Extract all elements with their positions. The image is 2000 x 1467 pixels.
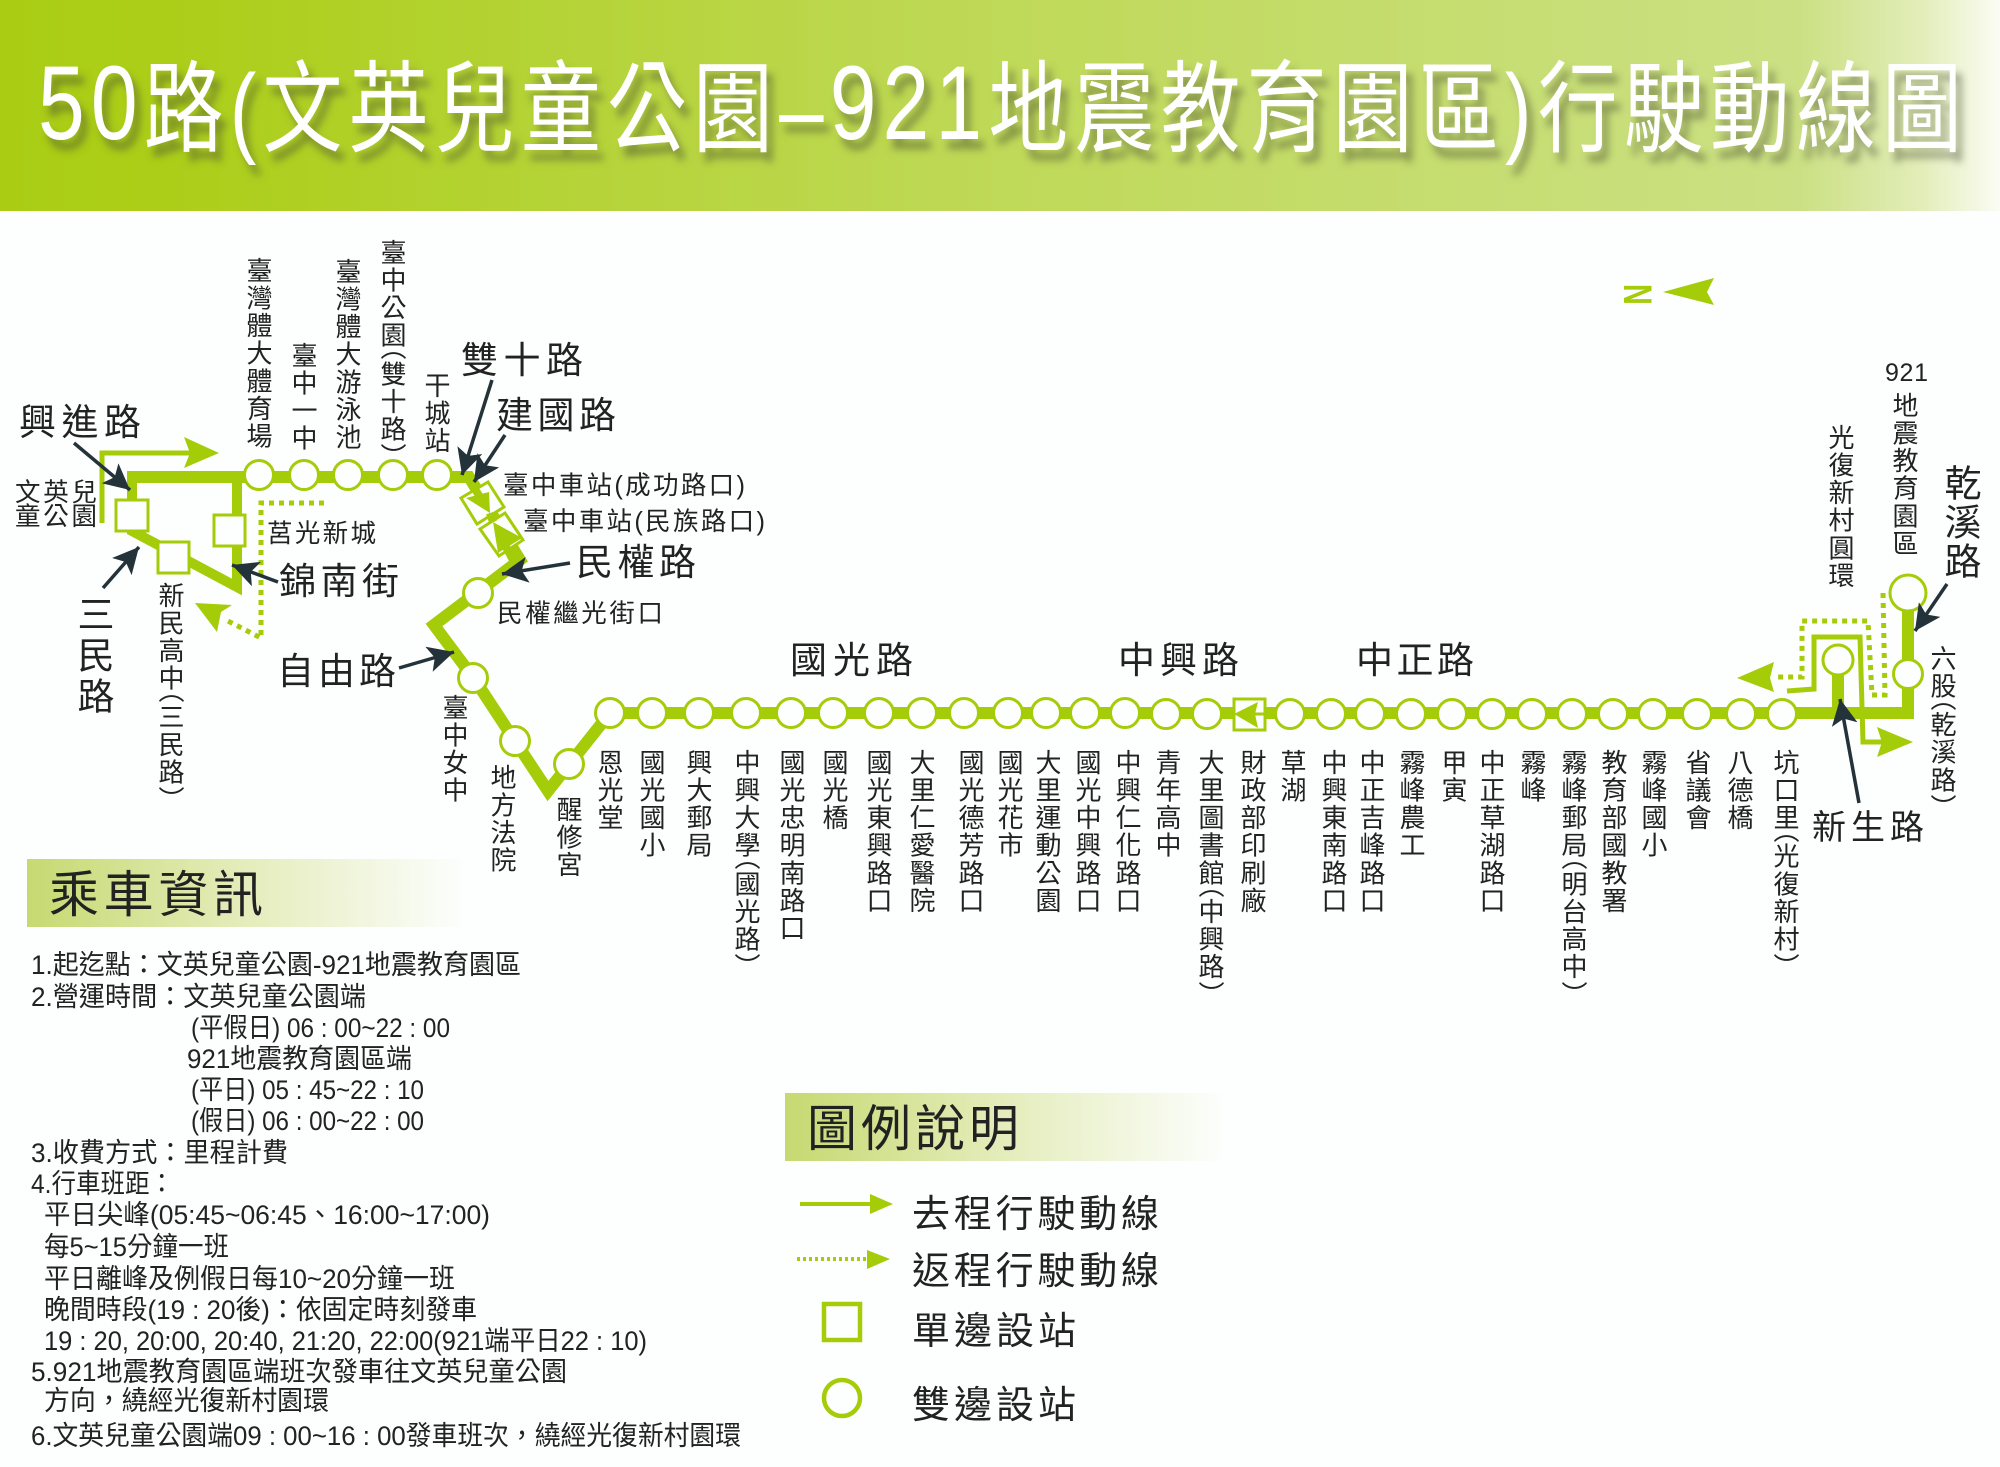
thin outbound arrow: start — [102, 437, 219, 523]
title text: 路(文英兒童公園– — [144, 55, 824, 166]
small station labels: horizontal: 莒光新城 — [267, 520, 376, 548]
label: 國光國小: 國光國小 — [634, 749, 671, 859]
two-side stations: top row and descent — [244, 460, 584, 778]
label: 大里運動公園: 大里運動公園 — [1030, 749, 1067, 915]
boarding info text: 5.921地震教育園區端班次發車往文英兒童公園 — [31, 1357, 567, 1387]
label: 臺中一中: 臺中一中 — [286, 342, 323, 452]
label: 草湖: 草湖 — [1275, 749, 1312, 804]
road names: 錦南街 — [279, 561, 399, 602]
label: 興大郵局: 興大郵局 — [681, 749, 718, 859]
vertical road name: 三民路: 三民路 — [69, 595, 123, 718]
legend: one-side station — [824, 1304, 1076, 1353]
label: 國光東興路口: 國光東興路口 — [861, 749, 898, 915]
boarding info text: (平日) 05 : 45~22 : 10 — [191, 1075, 424, 1105]
dotted return loop arrow: 光復新村 — [1737, 593, 1885, 695]
title banner — [0, 0, 2000, 211]
boarding info text: (平假日) 06 : 00~22 : 00 — [191, 1013, 450, 1043]
main outbound route line — [127, 475, 1908, 791]
small station labels: horizontal: 文英兒 — [15, 479, 97, 507]
label: 中興大學(國光路): 中興大學（ 國光路 ） — [729, 749, 766, 979]
legend band — [785, 1093, 1227, 1161]
boarding info text: 1.起迄點：文英兒童公園-921地震教育園區 — [31, 950, 521, 980]
legend band: 圖例說明 — [807, 1101, 1019, 1157]
two-side stations: terminal end — [1823, 575, 1926, 688]
label: 恩光堂: 恩光堂 — [592, 749, 629, 832]
label: 中興東南路口: 中興東南路口 — [1316, 749, 1353, 915]
label: 霧峰: 霧峰 — [1515, 749, 1552, 804]
north compass — [1615, 278, 1714, 305]
small station labels: horizontal: 童公園 — [15, 503, 97, 531]
boarding info band — [27, 859, 467, 927]
legend: return line: 返程行駛動線 — [912, 1251, 1159, 1293]
label: 光復新村圓環: 光復新村圓環 — [1823, 424, 1860, 590]
title text — [38, 45, 1962, 166]
north compass: N — [1615, 284, 1660, 305]
label: 干城站: 干城站 — [419, 372, 456, 455]
label: 醒修宮: 醒修宮 — [551, 796, 588, 879]
label: 國光德芳路口: 國光德芳路口 — [953, 749, 990, 915]
boarding info text: 方向，繞經光復新村園環 — [44, 1386, 329, 1416]
label: 六股(乾溪路): 六股（ 乾溪路 ） — [1925, 645, 1962, 820]
label: 臺灣體大體育場: 臺灣體大體育場 — [241, 257, 278, 450]
legend: two-side station — [824, 1380, 1076, 1427]
label: 大里圖書館(中興路): 大里圖書館（ 中興路 ） — [1193, 749, 1230, 1007]
road names: 自由路 — [277, 651, 396, 692]
one-side stations: start loop — [116, 500, 245, 573]
one-side stations: Taichung Station — [461, 480, 523, 562]
boarding info text: 6.文英兒童公園端09 : 00~16 : 00發車班次，繞經光復新村園環 — [31, 1421, 741, 1451]
label: 國光中興路口: 國光中興路口 — [1070, 749, 1107, 915]
boarding info text: 19 : 20, 20:00, 20:40, 21:20, 22:00(921端平日22 : 10) — [44, 1326, 647, 1356]
small station labels: horizontal: 臺中車站(成功路口) — [503, 472, 745, 500]
road names — [19, 340, 1924, 847]
road names: 新生路 — [1812, 809, 1924, 847]
boarding info text: 3.收費方式：里程計費 — [31, 1138, 288, 1168]
boarding info text: (假日) 06 : 00~22 : 00 — [191, 1106, 424, 1136]
small station labels: horizontal: 921 — [1885, 359, 1928, 387]
label: 坑口里(光復新村): 坑口里（ 光復新村 ） — [1768, 749, 1805, 979]
boarding info text: 每5~15分鐘一班 — [44, 1232, 229, 1262]
small station labels: horizontal: 臺中車站(民族路口) — [523, 508, 765, 536]
boarding info text: 2.營運時間：文英兒童公園端 — [31, 982, 366, 1012]
boarding info text: 4.行車班距： — [31, 1169, 174, 1199]
boarding info band: 乘車資訊 — [49, 867, 263, 923]
label: 中興仁化路口: 中興仁化路口 — [1110, 749, 1147, 915]
two-side stations: main line — [596, 698, 1796, 728]
vertical road name: 乾溪路: 乾溪路 — [1936, 464, 1990, 581]
legend: outbound line: 去程行駛動線 — [912, 1194, 1159, 1236]
road names: 中正路 — [1356, 640, 1474, 681]
label: 八德橋: 八德橋 — [1722, 749, 1759, 832]
label: 甲寅: 甲寅 — [1436, 749, 1473, 804]
small station labels: horizontal — [15, 359, 1928, 628]
road names: 建國路 — [496, 395, 616, 436]
label: 省議會: 省議會 — [1680, 749, 1717, 832]
label: 國光忠明南路口: 國光忠明南路口 — [774, 749, 811, 942]
label: 國光花市: 國光花市 — [992, 749, 1029, 859]
label: 國光橋: 國光橋 — [817, 749, 854, 832]
label: 霧峰郵局(明台高中): 霧峰郵局（ 明台高中 ） — [1556, 749, 1593, 1007]
label: 臺中女中: 臺中女中 — [437, 694, 474, 804]
road names: 雙十路 — [461, 340, 583, 381]
one-side station with direction arrow — [1234, 699, 1265, 730]
label: 霧峰農工: 霧峰農工 — [1394, 749, 1431, 859]
road names: 民權路 — [576, 542, 696, 583]
road names: 興進路 — [19, 402, 141, 443]
road names: 中興路 — [1118, 640, 1239, 681]
boarding info text: 晚間時段(19 : 20後)：依固定時刻發車 — [44, 1295, 477, 1325]
label: 教育部國教署: 教育部國教署 — [1596, 749, 1633, 915]
label: 地震教育園區: 地震教育園區 — [1887, 392, 1924, 558]
label: 新民高中(三民路): 新民高中（ 三民路 ） — [153, 582, 190, 812]
boarding info text: 平日離峰及例假日每10~20分鐘一班 — [44, 1264, 455, 1294]
label: 財政部印刷廠: 財政部印刷廠 — [1235, 749, 1272, 915]
legend: outbound line — [800, 1194, 1159, 1236]
label: 地方法院: 地方法院 — [485, 764, 522, 874]
label: 臺灣體大游泳池: 臺灣體大游泳池 — [330, 258, 367, 451]
small station labels: horizontal: 民權繼光街口 — [497, 600, 663, 628]
boarding info text: 平日尖峰(05:45~06:45、16:00~17:00) — [44, 1200, 490, 1230]
legend: one-side station: 單邊設站 — [912, 1311, 1076, 1353]
title text: 50 — [38, 45, 138, 162]
road names: 國光路 — [790, 640, 913, 681]
label: 霧峰國小: 霧峰國小 — [1636, 749, 1673, 859]
boarding info text — [31, 950, 741, 1451]
pointer arrows to road names — [74, 380, 1947, 803]
thin outbound loop arrow: 光復新村 — [1787, 637, 1913, 757]
label: 中正草湖路口: 中正草湖路口 — [1474, 749, 1511, 915]
dotted return arrow: start — [195, 503, 324, 638]
title text: 地震教育園區)行駛動線圖 — [988, 55, 1962, 166]
label: 青年高中: 青年高中 — [1150, 749, 1187, 859]
boarding info text: 921地震教育園區端 — [187, 1044, 412, 1074]
title text: 921 — [830, 45, 982, 162]
legend: return line — [797, 1250, 1159, 1293]
legend: two-side station: 雙邊設站 — [912, 1385, 1076, 1427]
label: 中正吉峰路口: 中正吉峰路口 — [1354, 749, 1391, 915]
label: 臺中公園(雙十路): 臺中公園（ 雙十路 ） — [375, 239, 412, 469]
label: 大里仁愛醫院: 大里仁愛醫院 — [904, 749, 941, 915]
